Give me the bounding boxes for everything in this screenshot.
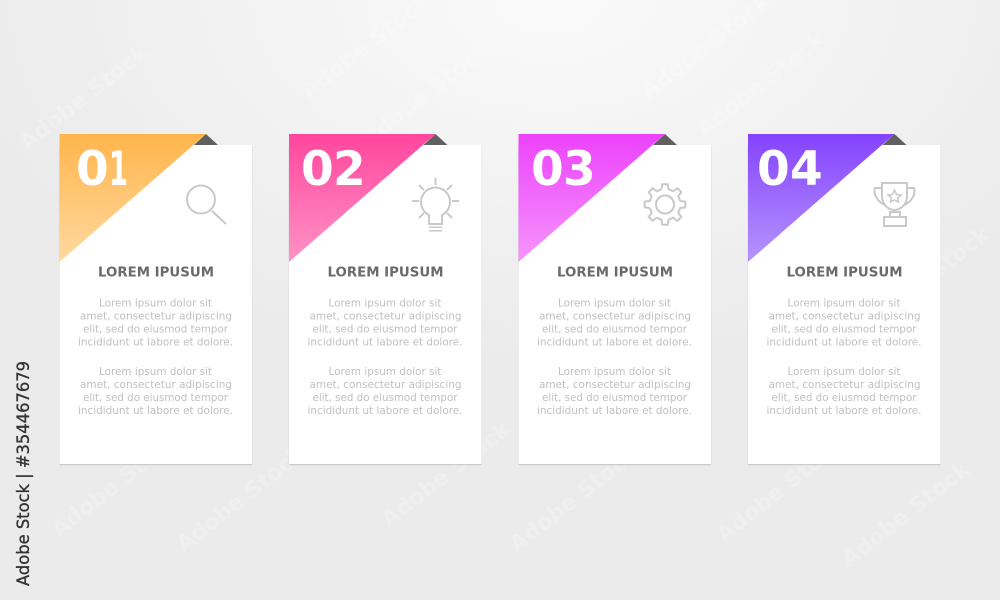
- card 4 text block 2: elit, sed do eiusmod tempor: [772, 392, 917, 404]
- card 3 body: [518, 145, 711, 464]
- watermark pattern: Adobe Stock: [172, 441, 311, 558]
- card 3 text block 1: amet, consectetur adipiscing: [539, 310, 691, 322]
- card 3 text block 1: [537, 298, 692, 348]
- card 3 heading: LOREM IPUSUM: [557, 266, 673, 280]
- card 1 text block 1: [78, 298, 233, 348]
- stock id side label: Adobe Stock | #354467679: [14, 361, 34, 586]
- card 3 number: 03: [531, 142, 596, 197]
- card 3 text block 2: incididunt ut labore et dolore.: [537, 405, 692, 417]
- card 2 text block 2: incididunt ut labore et dolore.: [308, 405, 462, 417]
- card 3 text block 2: elit, sed do eiusmod tempor: [542, 392, 688, 404]
- card 2 text block 1: [308, 298, 462, 348]
- card 2 colour corner: [289, 134, 436, 262]
- card 1 fold: [194, 134, 218, 145]
- card 3 fold: [653, 134, 677, 145]
- icon: trophy: [875, 183, 914, 226]
- panel: card 1: [60, 134, 252, 464]
- card 2 text block 2: amet, consectetur adipiscing: [310, 379, 462, 391]
- card 1 text block 2: elit, sed do eiusmod tempor: [83, 392, 229, 404]
- card 2 number: 02: [301, 142, 366, 197]
- card 1 text block 1: elit, sed do eiusmod tempor: [83, 324, 229, 336]
- card 2 body: [289, 145, 482, 464]
- card 4 text block 1: amet, consectetur adipiscing: [768, 310, 920, 322]
- watermark pattern: Adobe Stock: [15, 39, 154, 156]
- watermark pattern: Adobe Stock: [712, 431, 851, 548]
- card 4 body: [748, 145, 940, 464]
- card 1 text block 2: Lorem ipsum dolor sit: [99, 366, 212, 378]
- card 1 number: [76, 142, 128, 197]
- card 3 text block 2: Lorem ipsum dolor sit: [558, 366, 671, 378]
- card 3 text block 2: amet, consectetur adipiscing: [539, 379, 691, 391]
- card 4 heading: LOREM IPUSUM: [786, 266, 902, 280]
- icon: gear: [645, 184, 685, 225]
- card 4 text block 2: Lorem ipsum dolor sit: [788, 366, 900, 378]
- card 4 fold: [882, 134, 906, 145]
- card 2 fold: [424, 134, 448, 145]
- card 3 text block 1: elit, sed do eiusmod tempor: [542, 324, 688, 336]
- card 2 text block 2: elit, sed do eiusmod tempor: [312, 392, 458, 404]
- card 4 text block 1: Lorem ipsum dolor sit: [788, 298, 900, 310]
- card 2 heading: LOREM IPUSUM: [328, 266, 444, 280]
- card 3 text block 1: incididunt ut labore et dolore.: [537, 336, 692, 348]
- card 1 heading: LOREM IPUSUM: [98, 266, 214, 280]
- card 4 colour corner: [748, 134, 894, 262]
- card 4 number: 04: [757, 142, 823, 197]
- panel: card 4: [748, 134, 940, 464]
- card 3 text block 2: [537, 366, 692, 417]
- panel: card 2: [289, 134, 482, 464]
- card 4 text block 1: elit, sed do eiusmod tempor: [772, 324, 917, 336]
- icon: magnifier: [187, 186, 226, 224]
- icon: light bulb: [412, 178, 459, 231]
- watermark pattern: Adobe Stock: [47, 426, 186, 543]
- card 4 text block 2: amet, consectetur adipiscing: [768, 379, 920, 391]
- card 1 colour corner: [60, 134, 206, 262]
- card 4 text block 1: incididunt ut labore et dolore.: [766, 336, 922, 348]
- card 2 text block 1: Lorem ipsum dolor sit: [328, 298, 442, 310]
- watermark pattern: Adobe Stock: [505, 441, 644, 558]
- card 1 text block 2: [78, 366, 233, 417]
- card 1 body: [60, 145, 252, 464]
- card 1 text block 1: amet, consectetur adipiscing: [80, 310, 232, 322]
- card 1 text block 2: amet, consectetur adipiscing: [80, 379, 232, 391]
- watermark pattern: Adobe Stock: [857, 221, 996, 338]
- card 4 text block 2: [766, 366, 922, 417]
- watermark pattern: Adobe Stock: [357, 36, 496, 153]
- card 2 text block 1: amet, consectetur adipiscing: [310, 310, 462, 322]
- card 2 text block 2: [308, 366, 462, 417]
- card 4 text block 1: [766, 298, 922, 348]
- panel: card 3: [518, 134, 711, 464]
- watermark pattern: Adobe Stock: [837, 456, 976, 573]
- card 2 text block 1: incididunt ut labore et dolore.: [308, 336, 462, 348]
- card 2 text block 2: Lorem ipsum dolor sit: [328, 366, 442, 378]
- card 1 number: 1: [109, 142, 128, 197]
- card 1 text block 1: Lorem ipsum dolor sit: [99, 298, 212, 310]
- card 1 text block 1: incididunt ut labore et dolore.: [78, 336, 233, 348]
- card 3 text block 1: Lorem ipsum dolor sit: [558, 298, 671, 310]
- card 3 colour corner: [518, 134, 665, 262]
- watermark pattern: Adobe Stock: [692, 26, 831, 143]
- card 1 number: 0: [76, 142, 109, 197]
- card 4 text block 2: incididunt ut labore et dolore.: [766, 405, 922, 417]
- watermark pattern: Adobe Stock: [377, 416, 516, 533]
- card 2 text block 1: elit, sed do eiusmod tempor: [312, 324, 458, 336]
- card 1 text block 2: incididunt ut labore et dolore.: [78, 405, 233, 417]
